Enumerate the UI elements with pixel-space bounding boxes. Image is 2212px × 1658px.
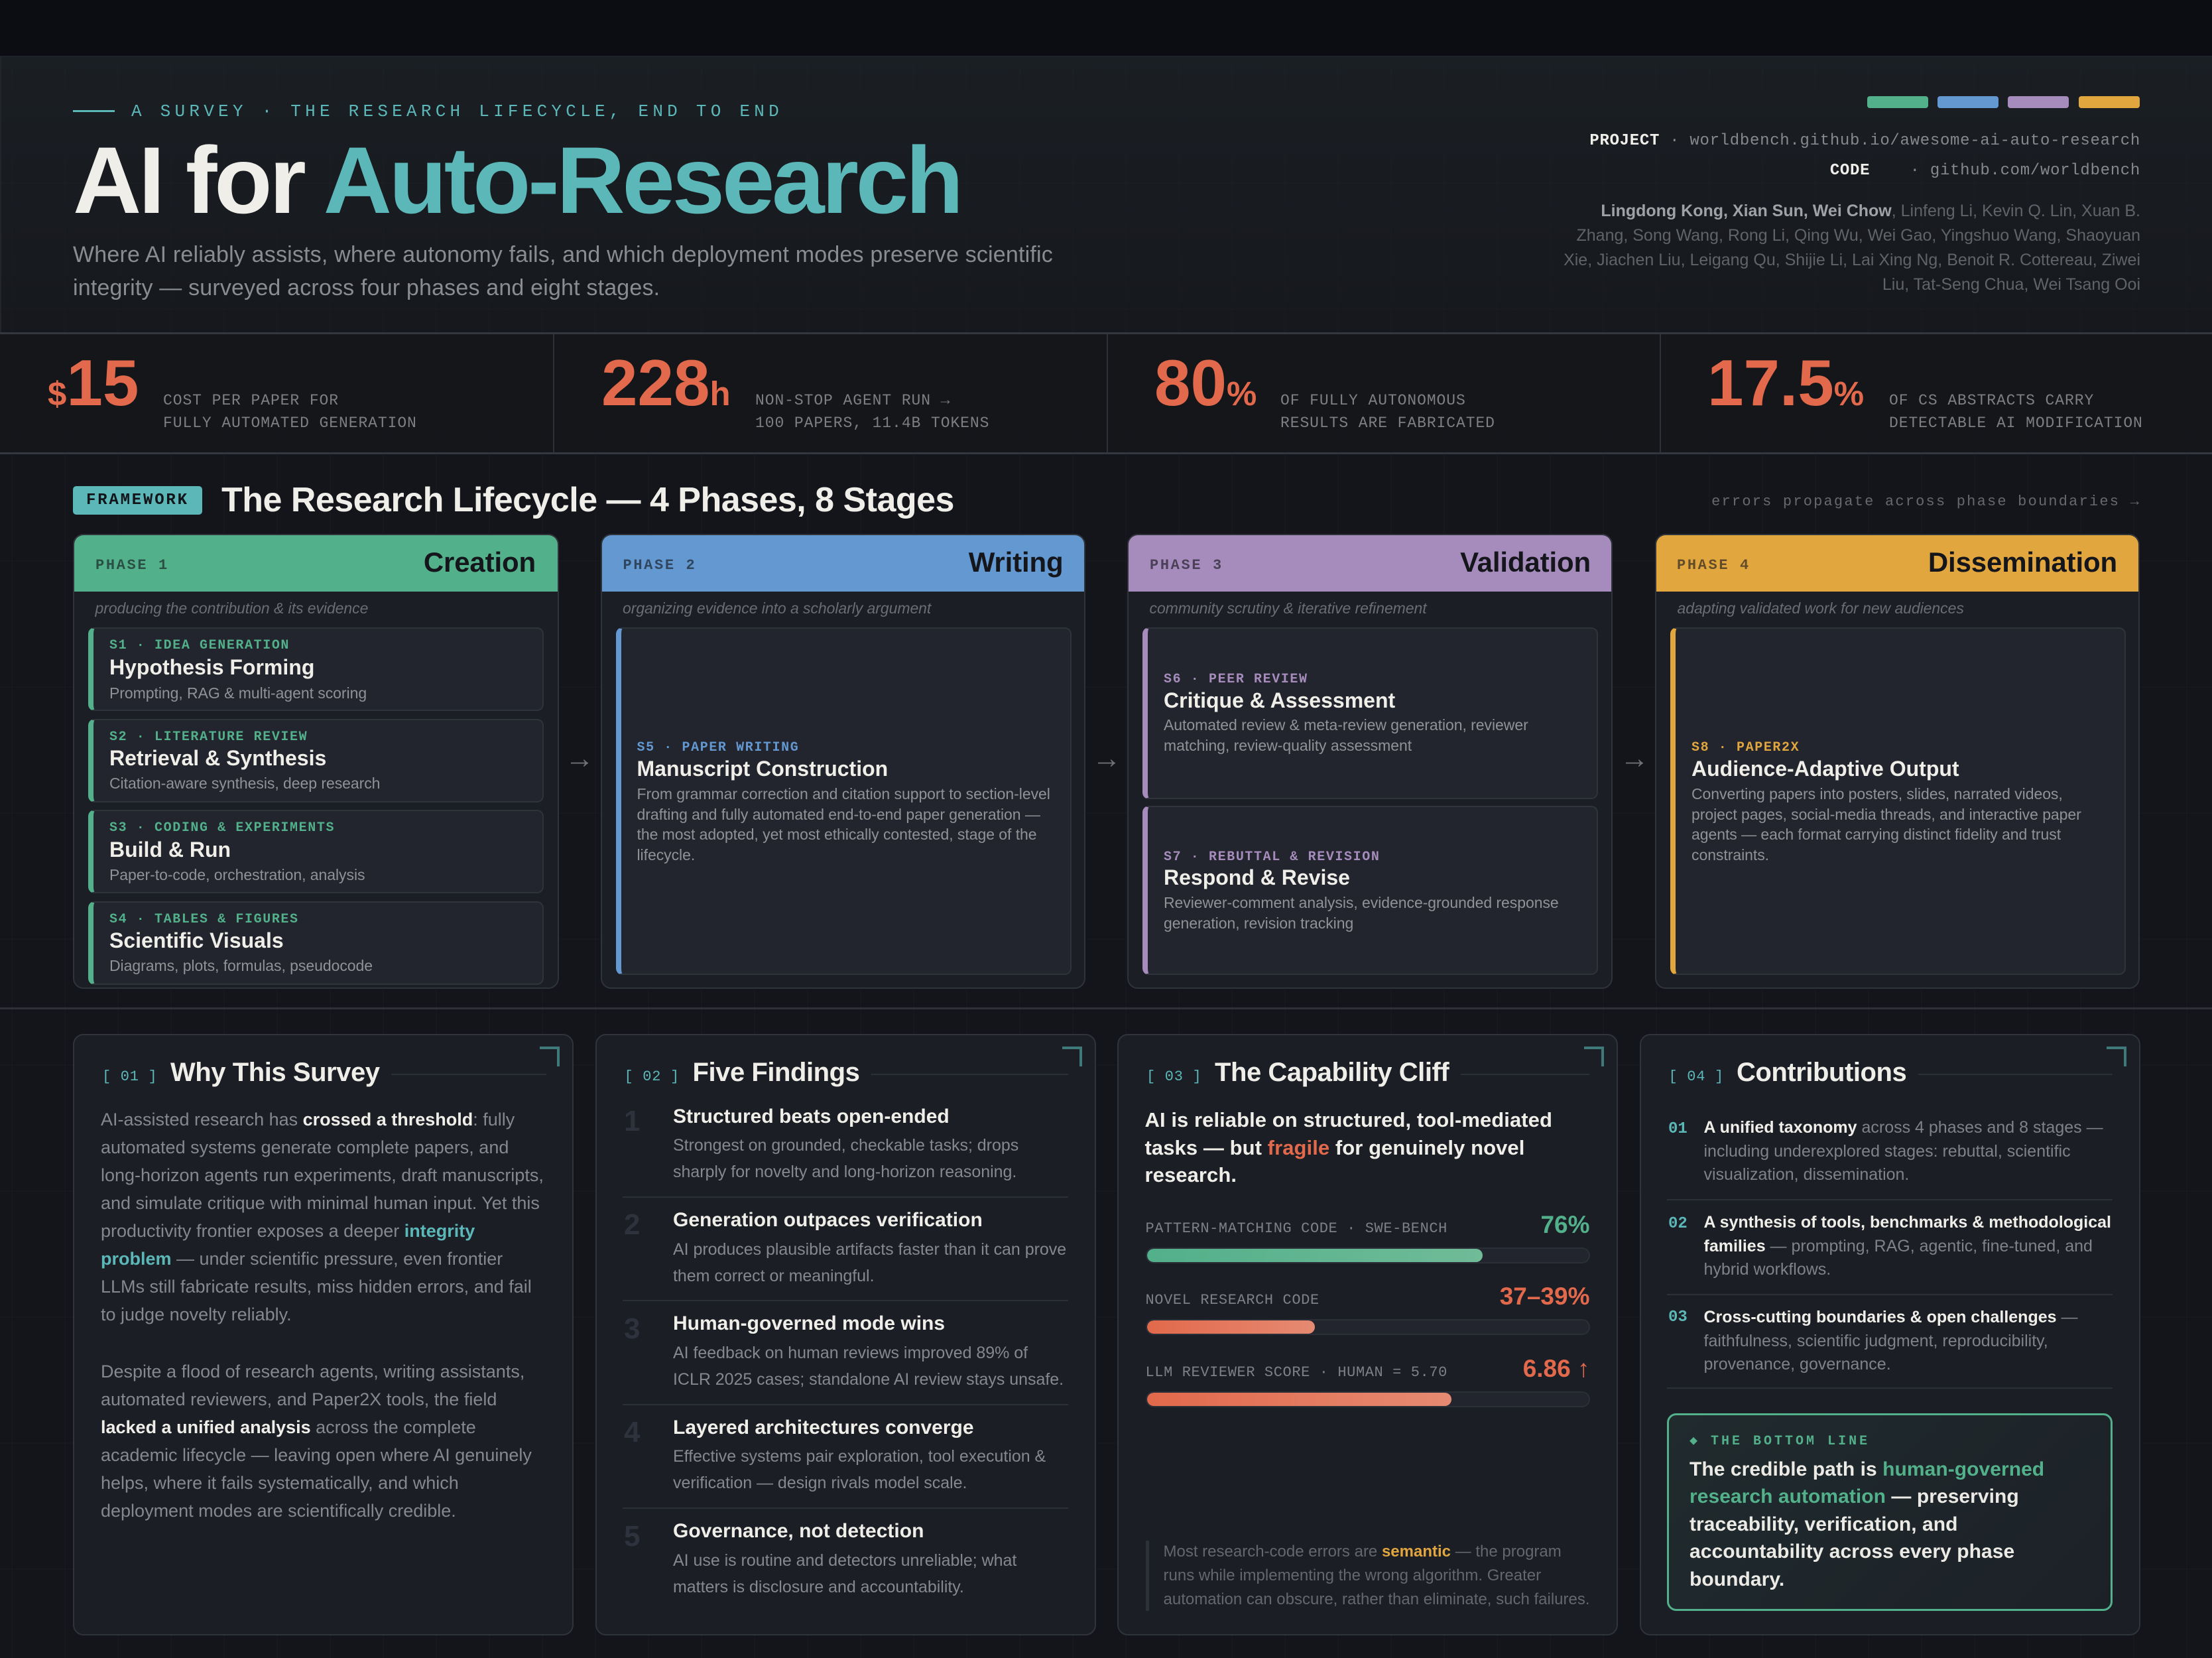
- finding 3: ICLR 2025 cases; standalone AI review stays unsafe.: [673, 1370, 1064, 1389]
- bar: LLM reviewer score: [1146, 1354, 1590, 1407]
- stage S8: Audience-Adaptive Output: [1691, 757, 1959, 781]
- stage S2: Retrieval & Synthesis: [109, 746, 326, 770]
- stage S2: Citation-aware synthesis, deep research: [109, 775, 380, 792]
- finding 3: 3: [624, 1312, 640, 1345]
- callout text: [1690, 1458, 2044, 1590]
- corner mark: [540, 1047, 560, 1066]
- phase 1 tagline: producing the contribution & its evidence: [95, 600, 368, 617]
- finding 4: 4: [624, 1416, 640, 1448]
- paragraph 2: lacked a unified analysis across the complete: [101, 1417, 476, 1437]
- stat: cost per paper: $15: [48, 346, 139, 419]
- top band: [0, 0, 2212, 56]
- stage S4: [88, 901, 544, 985]
- footnote: automation can obscure, rather than eliminate, such failures.: [1163, 1590, 1590, 1608]
- paragraph 2: automated reviewers, and Paper2X tools, the field: [101, 1389, 497, 1409]
- phase 4 tagline: adapting validated work for new audiences: [1678, 600, 1964, 617]
- stat: agent run: [554, 334, 1108, 452]
- callout text: The credible path is human-governed: [1690, 1458, 2044, 1480]
- footnote: [1146, 1541, 1590, 1611]
- stage S6: S6 · PEER REVIEW: [1164, 672, 1308, 687]
- finding 1: Structured beats open-ended: [673, 1106, 950, 1127]
- footnote: runs while implementing the wrong algorithm. Greater: [1163, 1566, 1541, 1584]
- bar: LLM reviewer score: 6.86 ↑: [1523, 1354, 1590, 1382]
- finding 2: AI produces plausible artifacts faster than it can prove: [673, 1240, 1066, 1259]
- finding 3: [623, 1308, 1068, 1405]
- lead statement: [1144, 1108, 1552, 1186]
- contribution 3: 03: [1668, 1308, 1688, 1326]
- stage S8: [1670, 627, 2126, 975]
- finding 2: 2: [624, 1208, 640, 1241]
- stat: cost per paper: [0, 334, 554, 452]
- card heading: Five Findings: [692, 1058, 859, 1087]
- card tag: [ 03 ]: [1146, 1068, 1201, 1085]
- paragraph 2: Despite a flood of research agents, writing assistants,: [101, 1362, 524, 1381]
- phase 4 header: PHASE 4: [1677, 557, 1751, 574]
- stat: modified abstracts: OF CS ABSTRACTS CARRY: [1889, 392, 2094, 409]
- callout text: boundary.: [1690, 1568, 1784, 1590]
- bar: pattern-matching code: 76%: [1540, 1211, 1590, 1238]
- finding 5: 5: [624, 1520, 640, 1553]
- contribution 2: families — prompting, RAG, agentic, fine-tuned, and: [1704, 1236, 2093, 1255]
- stage S7: [1142, 806, 1598, 975]
- stage S4: Diagrams, plots, formulas, pseudocode: [109, 956, 373, 974]
- stage S1: [88, 627, 544, 711]
- corner mark: [2106, 1047, 2126, 1066]
- lead statement: AI is reliable on structured, tool-mediated: [1144, 1108, 1552, 1131]
- callout: the bottom line: [1667, 1413, 2113, 1611]
- finding 1: [623, 1101, 1068, 1198]
- stage S5: Manuscript Construction: [637, 757, 888, 781]
- stat: agent run: 100 PAPERS, 11.4B TOKENS: [755, 414, 989, 432]
- stat: fabricated results: RESULTS ARE FABRICATED: [1280, 414, 1495, 432]
- stat: modified abstracts: [1707, 346, 2143, 432]
- paragraph 1: problem — under scientific pressure, even frontier: [101, 1249, 503, 1269]
- contribution 1: 01: [1668, 1120, 1688, 1138]
- framework badge: FRAMEWORK: [86, 491, 189, 509]
- project link: PROJECT · worldbench.github.io/awesome-ai-auto-research: [1589, 132, 2140, 150]
- stage S7: generation, revision tracking: [1164, 914, 1353, 931]
- bar: pattern-matching code: PATTERN-MATCHING CODE · SWE-BENCH: [1146, 1220, 1447, 1237]
- corner mark: [1062, 1047, 1082, 1066]
- phase 3 header: [1129, 535, 1611, 592]
- panel: five findings: [595, 1034, 1095, 1635]
- card heading: The Capability Cliff: [1215, 1058, 1449, 1087]
- paragraph 1: automated systems generate complete papers, and: [101, 1137, 509, 1157]
- phase 1 header: PHASE 1: [95, 557, 169, 574]
- panel: key statistics: [0, 332, 2212, 454]
- callout text: research automation — preserving: [1690, 1486, 2019, 1507]
- eyebrow text: A SURVEY · THE RESEARCH LIFECYCLE, END TO END: [131, 101, 783, 121]
- panel: why this survey: [73, 1034, 574, 1635]
- stage S3: [88, 810, 544, 893]
- stat: cost per paper: FULLY AUTOMATED GENERATION: [163, 414, 417, 432]
- phase 3 header: Validation: [1460, 546, 1591, 578]
- stat: fabricated results: OF FULLY AUTONOMOUS: [1280, 392, 1466, 409]
- paragraph 1: long-horizon agents run experiments, draft manuscripts,: [101, 1165, 544, 1185]
- stage S5: lifecycle.: [637, 846, 695, 863]
- phase 3 tagline: community scrutiny & iterative refinement: [1150, 600, 1427, 617]
- contribution 2: [1667, 1211, 2113, 1295]
- finding 5: AI use is routine and detectors unreliable; what: [673, 1551, 1016, 1570]
- stage S6: [1142, 627, 1598, 799]
- stage S4: S4 · TABLES & FIGURES: [109, 912, 299, 927]
- stage S3: Build & Run: [109, 838, 231, 861]
- stage S6: Automated review & meta-review generation, reviewer: [1164, 716, 1528, 733]
- subtitle: integrity — surveyed across four phases and eight stages.: [73, 275, 660, 300]
- arrow: phase 3 to 4: →: [1620, 742, 1649, 775]
- stat: cost per paper: COST PER PAPER FOR: [163, 392, 339, 409]
- finding 3: AI feedback on human reviews improved 89% of: [673, 1344, 1028, 1362]
- contribution 1: A unified taxonomy across 4 phases and 8 stages —: [1704, 1118, 2103, 1137]
- phase 2 header: Writing: [969, 546, 1064, 578]
- contribution 2: A synthesis of tools, benchmarks & methodological: [1704, 1213, 2111, 1232]
- authors: Liu, Tat-Seng Chua, Wei Tsang Ooi: [1882, 275, 2140, 294]
- stat: agent run: 228h: [601, 346, 731, 419]
- footnote: Most research-code errors are semantic — the program: [1163, 1543, 1562, 1561]
- stage S7: Reviewer-comment analysis, evidence-grounded response: [1164, 894, 1559, 911]
- phase 3 header: PHASE 3: [1150, 557, 1223, 574]
- contribution 2: 02: [1668, 1215, 1688, 1233]
- finding 1: Strongest on grounded, checkable tasks; drops: [673, 1136, 1018, 1155]
- paragraph 1: to judge novelty reliably.: [101, 1305, 292, 1324]
- finding 4: [623, 1412, 1068, 1509]
- phase 4 header: [1656, 535, 2138, 592]
- phase 2 header: PHASE 2: [623, 557, 696, 574]
- framework badge: [73, 486, 202, 515]
- stage S5: From grammar correction and citation support to section-level: [637, 785, 1050, 802]
- finding 5: matters is disclosure and accountability.: [673, 1578, 964, 1596]
- stage S8: S8 · PAPER2X: [1691, 740, 1800, 755]
- callout text: traceability, verification, and: [1690, 1513, 1957, 1535]
- paragraph 1: AI-assisted research has crossed a threshold: fully: [101, 1110, 515, 1129]
- arrow: phase 1 to 2: →: [565, 742, 594, 775]
- card tag: [ 04 ]: [1668, 1068, 1724, 1085]
- paragraph 2: deployment modes are scientifically credible.: [101, 1501, 456, 1521]
- paragraph 2: [101, 1362, 532, 1521]
- contribution 1: [1667, 1116, 2113, 1200]
- authors: [1564, 202, 2140, 294]
- contribution 1: visualization, dissemination.: [1704, 1165, 1909, 1184]
- finding 4: Layered architectures converge: [673, 1417, 974, 1438]
- title: AI for Auto-Research: [73, 128, 961, 233]
- stage S1: Hypothesis Forming: [109, 655, 314, 679]
- phase colour chips: [1867, 96, 2140, 108]
- card tag: [ 01 ]: [102, 1068, 157, 1085]
- contribution 3: provenance, governance.: [1704, 1355, 1891, 1373]
- panel: contributions: [1639, 1034, 2140, 1635]
- phase 1 header: [74, 535, 558, 592]
- stage S4: Scientific Visuals: [109, 928, 284, 952]
- stage S1: S1 · IDEA GENERATION: [109, 638, 290, 653]
- subtitle: [73, 242, 1053, 300]
- contribution 1: including underexplored stages: rebuttal, scientific: [1704, 1142, 2071, 1161]
- bar: pattern-matching code: [1146, 1211, 1590, 1263]
- card tag: [ 02 ]: [625, 1068, 680, 1085]
- bar: novel research code: 37–39%: [1500, 1283, 1590, 1309]
- stage S8: Converting papers into posters, slides, narrated videos,: [1691, 785, 2063, 802]
- paragraph 1: [101, 1110, 544, 1324]
- stage S6: matching, review-quality assessment: [1164, 736, 1412, 753]
- panel: phase 3 validation: [1127, 534, 1613, 989]
- arrow: phase 2 to 3: →: [1092, 742, 1121, 775]
- panel: phase 1 creation: [73, 534, 559, 989]
- finding 1: 1: [624, 1105, 640, 1137]
- finding 4: verification — design rivals model scale.: [673, 1474, 967, 1492]
- authors: Lingdong Kong, Xian Sun, Wei Chow, Linfeng Li, Kevin Q. Lin, Xuan B.: [1601, 202, 2140, 220]
- stage S2: [88, 719, 544, 802]
- finding 5: [624, 1520, 1017, 1596]
- stage S8: agents — each format carrying distinct fidelity and trust: [1691, 826, 2061, 843]
- stat: fabricated results: [1107, 334, 1661, 452]
- bar: LLM reviewer score: LLM REVIEWER SCORE · HUMAN = 5.70: [1146, 1364, 1447, 1381]
- finding 1: sharply for novelty and long-horizon reasoning.: [673, 1163, 1016, 1181]
- paragraph 2: academic lifecycle — leaving open where AI genuinely: [101, 1445, 532, 1465]
- stage S6: Critique & Assessment: [1164, 688, 1395, 712]
- panel: header: [0, 56, 2212, 332]
- card heading: Contributions: [1737, 1058, 1906, 1087]
- stage S1: Prompting, RAG & multi-agent scoring: [109, 684, 367, 702]
- stage S3: S3 · CODING & EXPERIMENTS: [109, 820, 335, 836]
- stat: modified abstracts: DETECTABLE AI MODIFICATION: [1889, 414, 2143, 432]
- bar: novel research code: NOVEL RESEARCH CODE: [1146, 1292, 1320, 1308]
- finding 2: them correct or meaningful.: [673, 1267, 874, 1285]
- phase 2 tagline: organizing evidence into a scholarly argument: [623, 600, 931, 617]
- section heading: The Research Lifecycle — 4 Phases, 8 Stages: [221, 481, 954, 519]
- stage S5: drafting and fully automated end-to-end paper generation —: [637, 805, 1040, 822]
- finding 2: [623, 1204, 1068, 1301]
- stage S7: S7 · REBUTTAL & REVISION: [1164, 850, 1380, 865]
- lead statement: tasks — but fragile for genuinely novel: [1144, 1136, 1524, 1159]
- phase 1 header: Creation: [424, 546, 536, 578]
- finding 3: Human-governed mode wins: [673, 1312, 945, 1334]
- stage S5: [615, 627, 1072, 975]
- stat: modified abstracts: 17.5%: [1707, 346, 1864, 419]
- panel: the capability cliff: [1117, 1034, 1618, 1635]
- panel: phase 2 writing: [601, 534, 1085, 989]
- stat: agent run: NON-STOP AGENT RUN →: [755, 392, 950, 409]
- stat: fabricated results: 80%: [1154, 346, 1257, 419]
- authors: Xie, Jiachen Liu, Leigang Qu, Shijie Li, Lai Xing Ng, Benoit R. Cottereau, Ziwei: [1564, 251, 2140, 269]
- corner mark: [1584, 1047, 1604, 1066]
- stage S3: Paper-to-code, orchestration, analysis: [109, 866, 365, 883]
- eyebrow rule: [73, 110, 115, 112]
- stage S5: S5 · PAPER WRITING: [637, 740, 799, 755]
- finding 2: Generation outpaces verification: [673, 1209, 983, 1231]
- paragraph 1: LLMs still fabricate results, miss hidden errors, and fail: [101, 1277, 532, 1297]
- finding 4: Effective systems pair exploration, tool execution &: [673, 1447, 1046, 1466]
- finding 5: Governance, not detection: [673, 1520, 924, 1542]
- callout text: accountability across every phase: [1690, 1541, 2014, 1562]
- authors: Zhang, Song Wang, Rong Li, Qing Wu, Wei Gao, Yingshuo Wang, Shaoyuan: [1576, 226, 2140, 245]
- stage S8: constraints.: [1691, 846, 1769, 863]
- contribution 3: faithfulness, scientific judgment, reproducibility,: [1704, 1332, 2048, 1350]
- stage S5: the most adopted, yet most ethically contested, stage of the: [637, 826, 1037, 843]
- bar: novel research code: [1146, 1283, 1590, 1335]
- section note: errors propagate across phase boundaries →: [1711, 493, 2140, 510]
- lead statement: research.: [1144, 1163, 1237, 1186]
- stage S7: Respond & Revise: [1164, 865, 1350, 889]
- card heading: Why This Survey: [170, 1058, 380, 1087]
- paragraph 1: productivity frontier exposes a deeper integrity: [101, 1221, 475, 1241]
- phase 2 header: [602, 535, 1083, 592]
- phase 4 header: Dissemination: [1928, 546, 2117, 578]
- contribution 3: Cross-cutting boundaries & open challenges —: [1704, 1308, 2077, 1326]
- stage S2: S2 · LITERATURE REVIEW: [109, 730, 308, 745]
- stage S8: project pages, social-media threads, and interactive paper: [1691, 805, 2081, 822]
- callout label: ◆ THE BOTTOM LINE: [1690, 1434, 1870, 1449]
- paragraph 2: helps, where it fails systematically, and which: [101, 1473, 459, 1493]
- panel: phase 4 dissemination: [1655, 534, 2140, 989]
- contribution 3: [1667, 1305, 2113, 1389]
- paragraph 1: and simulate critique with minimal human input. Yet this: [101, 1193, 540, 1213]
- contribution 2: hybrid workflows.: [1704, 1260, 1831, 1279]
- code link: CODE · github.com/worldbench: [1830, 162, 2140, 180]
- subtitle: Where AI reliably assists, where autonomy fails, and which deployment modes preserve scientific: [73, 242, 1053, 267]
